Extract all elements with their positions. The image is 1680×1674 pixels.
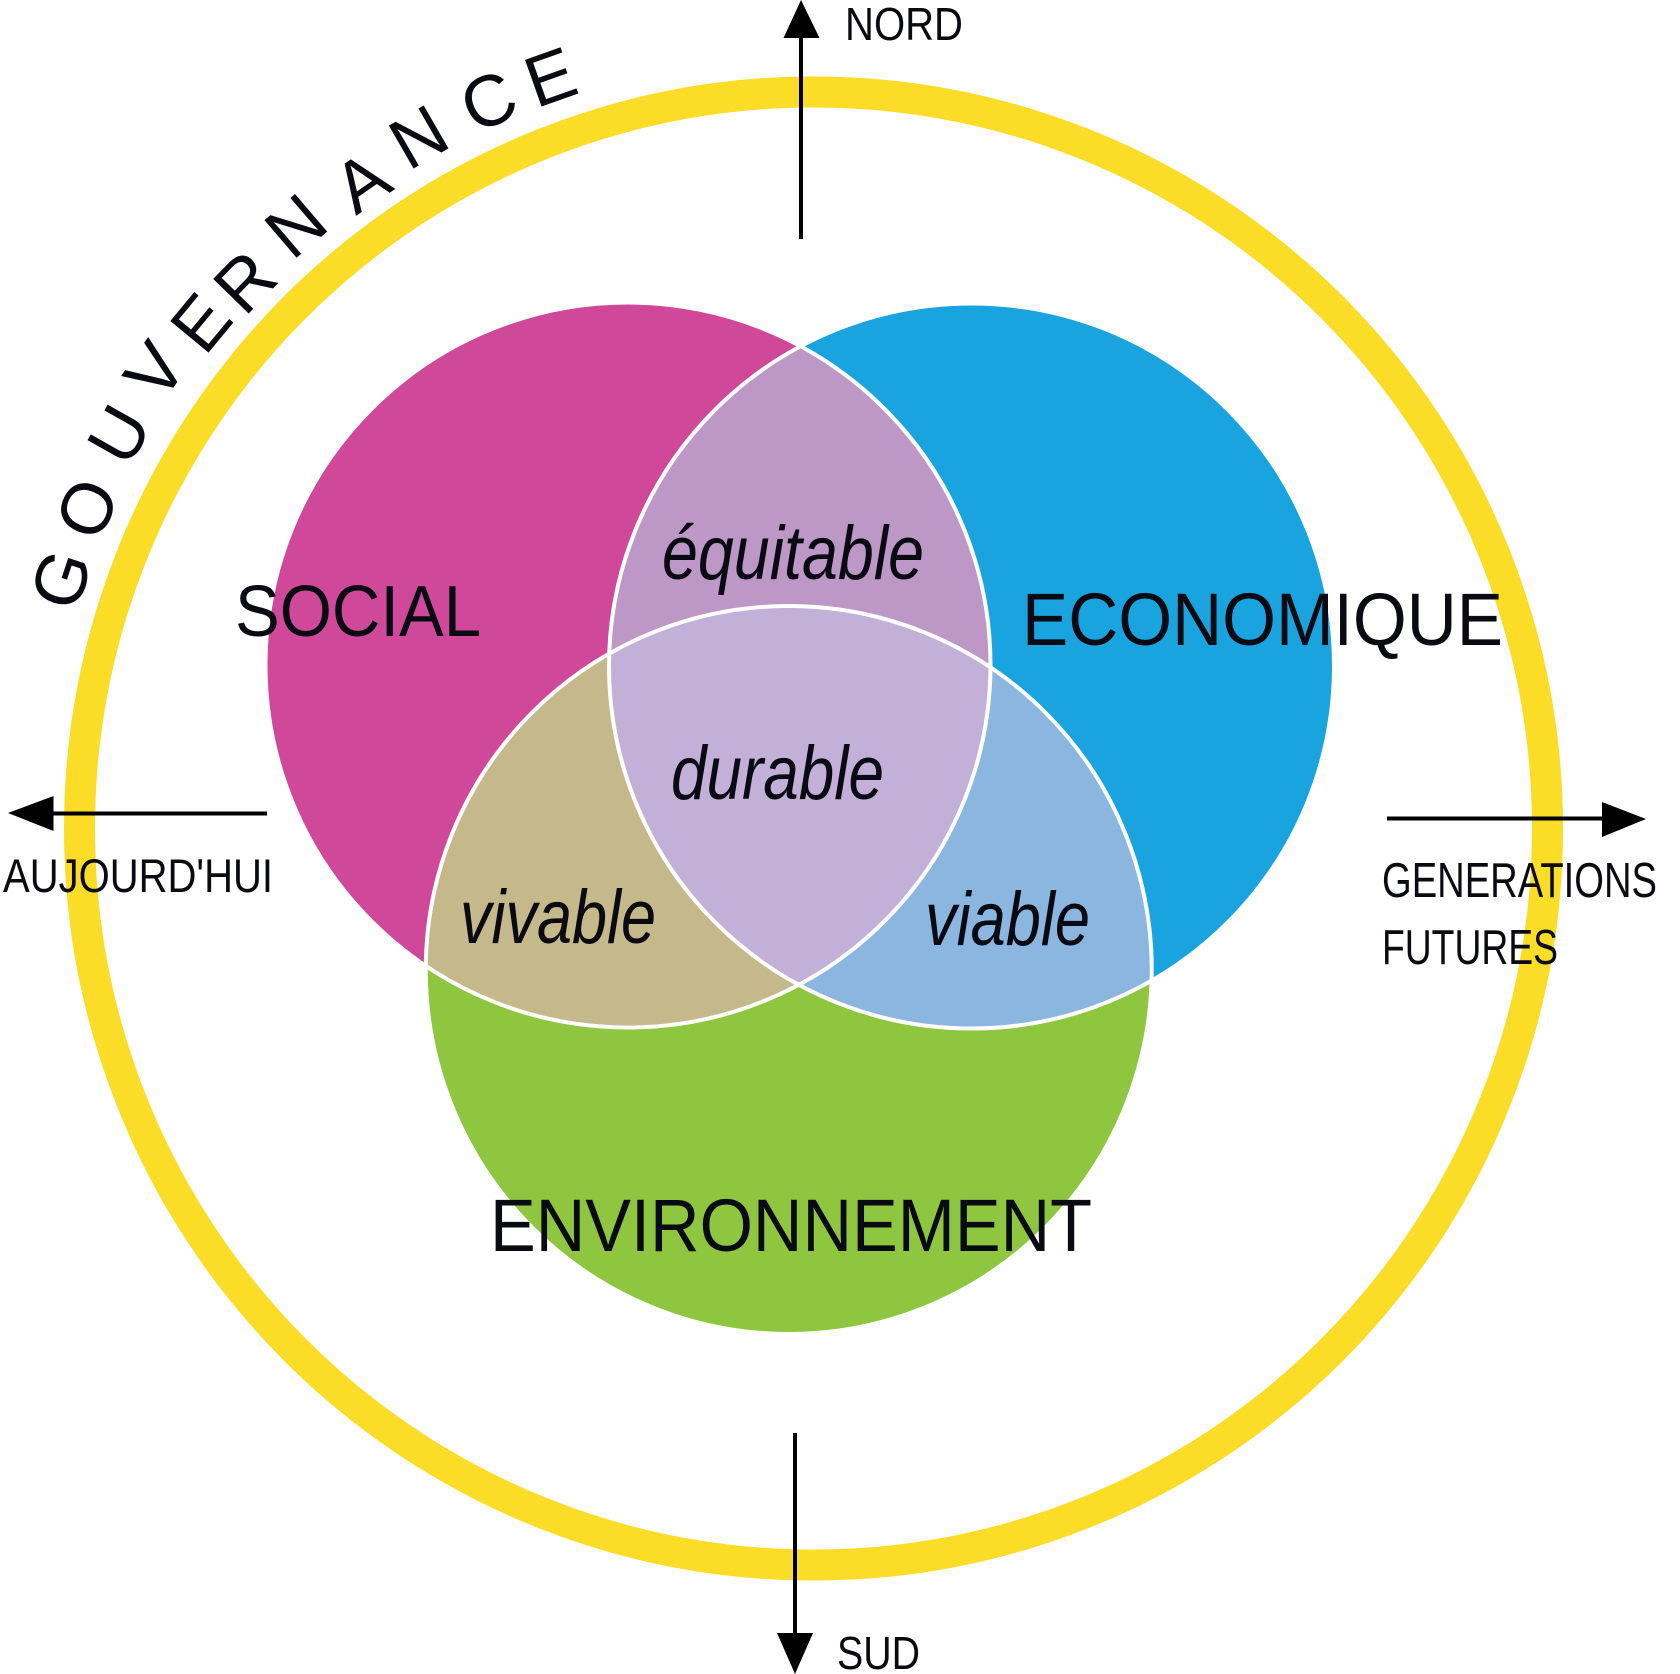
heading: GOUVERNANCE: G [15,540,109,619]
label: ENVIRONNEMENT: ENVIRONNEMENT [490,1184,1092,1267]
label: vivable: vivable [460,875,656,960]
heading: GOUVERNANCE: V [109,329,202,414]
arrow: future generations [1387,802,1646,837]
label: viable: viable [925,877,1090,962]
heading: GOUVERNANCE: O [40,467,136,551]
white outlines of circles [266,302,1334,1334]
circle: economique [609,304,1334,1028]
heading: GOUVERNANCE: A [320,136,405,229]
label: GENERATIONS FUTURES: FUTURES [1382,921,1558,975]
heading: GOUVERNANCE: U [72,393,167,477]
overlap: viable [803,671,1150,1026]
heading: GOUVERNANCE: N [376,90,462,185]
label: ECONOMIQUE: ECONOMIQUE [1022,578,1503,661]
heading: GOUVERNANCE: E [155,279,248,367]
label: AUJOURD'HUI: AUJOURD'HUI [3,849,273,902]
heading: GOUVERNANCE: E [515,32,587,124]
overlap: equitable [611,348,988,664]
heading: GOUVERNANCE: R [199,236,292,329]
label: GENERATIONS FUTURES [1382,854,1657,975]
label: durable: durable [671,731,884,816]
ring: governance [80,92,1548,1565]
label: SOCIAL: SOCIAL [235,572,481,652]
overlap: durable [611,608,988,982]
circle: environnement [426,606,1152,1334]
arrow: north [784,0,820,239]
label: equitable: équitable [662,511,924,596]
overlap: vivable [428,657,794,1026]
heading: GOUVERNANCE: N [251,179,342,274]
heading: GOUVERNANCE: C [449,55,529,149]
arrow: south [777,1433,813,1674]
arrow: today [8,796,267,831]
circle: social [266,302,990,1028]
heading: GOUVERNANCE [15,32,587,619]
